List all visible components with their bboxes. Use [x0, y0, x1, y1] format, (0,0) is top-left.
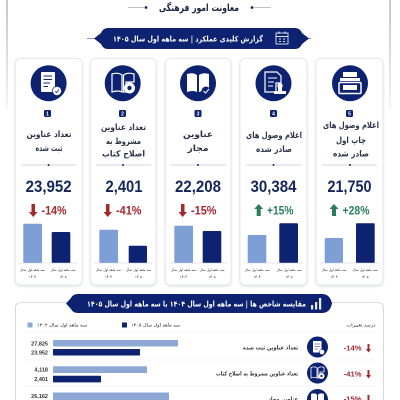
change: -41%: [116, 206, 142, 218]
icon: document: [307, 336, 328, 358]
change: -15%: [191, 206, 216, 218]
bar chart: سه ماهه اول سال: [50, 268, 76, 272]
icon: open book with check: [180, 65, 216, 101]
panel: card 1 registered titles: [16, 58, 82, 285]
card title: عناوین: [183, 130, 213, 140]
card title: مشروط به: [106, 137, 141, 147]
number badge 2: [119, 110, 126, 118]
value: 22,208: [175, 177, 221, 196]
icon: bar chart glyph: [311, 298, 321, 310]
section banner: key performance report: گزارش کلیدی عملکرد | سه ماهه اول سال ۱۴۰۵: [113, 34, 263, 44]
legend: سه ماهه اول سال ۱۴۰۵: [131, 324, 180, 328]
number badge 1: [44, 110, 51, 118]
change: [29, 204, 66, 218]
row 3: 26,162: [31, 394, 48, 400]
title: معاونت امور فرهنگی: [159, 1, 239, 14]
bar chart: [320, 223, 379, 279]
row 2: [34, 362, 371, 384]
bar chart: ۱۴۰۵: [59, 275, 67, 279]
bar chart: سه ماهه اول سال: [20, 268, 45, 272]
section banner: comparison: مقایسه شاخص ها | سه ماهه اول سال ۱۴۰۴ با سه ماهه اول سال ۱۴۰۵: [87, 300, 306, 310]
row 1: 27,825: [31, 342, 48, 348]
bar chart: ۱۴۰۴: [105, 275, 112, 279]
bar chart: سه ماهه اول سال: [321, 268, 347, 272]
card title: [183, 130, 213, 154]
number badge 4: 4: [272, 112, 275, 118]
change: [254, 204, 294, 218]
bar chart: سه ماهه اول سال: [96, 268, 121, 272]
bar chart: ۱۴۰۴: [330, 275, 338, 279]
card title: اعلام وصول های: [246, 131, 302, 141]
number badge 5: 5: [348, 112, 351, 118]
bar chart: سه ماهه اول سال: [199, 268, 225, 272]
change: -14%: [42, 206, 66, 218]
card title: [26, 130, 72, 154]
change: +15%: [267, 206, 294, 218]
icon: calendar: [276, 32, 288, 44]
bar chart: ۱۴۰۵: [135, 275, 142, 279]
card title: [101, 123, 146, 160]
panel: card 2 titles conditional on correction: [90, 58, 156, 285]
card title: [246, 131, 302, 155]
value: 23,952: [26, 177, 72, 196]
bar chart: سه ماهه اول سال: [126, 268, 151, 272]
icon: open book: [307, 389, 328, 400]
card title: اعلام وصول های: [323, 121, 379, 131]
row 2: -41%: [344, 370, 362, 378]
icon: printing machine: [332, 65, 368, 101]
icon: document with check: [31, 65, 67, 101]
number badge 2: 2: [121, 112, 124, 118]
row 1: -14%: [344, 344, 362, 352]
icon: book with gear: [307, 362, 328, 384]
row 1: [31, 336, 371, 358]
section banner: comparison: [66, 294, 332, 313]
bar chart: سه ماهه اول سال: [276, 268, 302, 272]
bar chart: ۱۴۰۵: [208, 275, 216, 279]
bar chart: [94, 230, 153, 279]
bar chart: سه ماهه اول سال: [352, 268, 378, 272]
card title: ثبت شده: [36, 144, 62, 154]
row 2: 4,118: [35, 368, 48, 374]
bar chart: ۱۴۰۴: [253, 275, 261, 279]
bar chart: سه ماهه اول سال: [171, 268, 196, 272]
change: [104, 204, 142, 218]
row 1: تعداد عناوین ثبت شده: [243, 346, 298, 352]
icon: book with gear: [105, 65, 141, 101]
icon: document with stamp: [256, 65, 292, 101]
row 3: [31, 389, 371, 400]
number badge 1: 1: [46, 112, 49, 118]
column heading: درصد تغییرات: [346, 324, 376, 328]
card title: چاپ اول: [336, 136, 366, 146]
bar chart: سه ماهه اول سال: [244, 268, 270, 272]
panel: card 4 issued receipts: [240, 58, 307, 285]
panel: card 5 first-print receipts: [316, 58, 383, 285]
bar chart: ۱۴۰۴: [29, 275, 36, 279]
change: [330, 204, 370, 218]
number badge 5: [346, 110, 353, 118]
card title: مجاز: [186, 144, 208, 154]
number badge 3: [194, 110, 202, 118]
change: [178, 204, 216, 218]
bar chart: [169, 226, 228, 279]
legend: سه ماهه اول سال ۱۴۰۴: [37, 324, 87, 328]
card title: تعداد عناوین: [26, 130, 72, 140]
bar chart: ۱۴۰۵: [285, 275, 293, 279]
section banner: key performance report: [87, 28, 311, 49]
change: +28%: [342, 206, 370, 218]
value: 30,384: [250, 177, 297, 196]
row 2: تعداد عناوین مشروط به اصلاح کتاب: [216, 370, 298, 378]
bar chart: [244, 223, 303, 279]
bar chart: [19, 224, 78, 279]
number badge 3: 3: [197, 112, 200, 118]
card title: صادر شده: [333, 150, 369, 160]
card title: اصلاح کتاب: [102, 150, 145, 160]
row 1: 23,952: [31, 350, 48, 356]
bar chart: ۱۴۰۴: [180, 275, 187, 279]
number badge 4: [270, 110, 277, 118]
value: 2,401: [106, 177, 142, 196]
value: 21,750: [328, 177, 372, 196]
row 2: 2,401: [34, 377, 48, 383]
panel: comparison table: [16, 294, 384, 400]
legend: [28, 322, 180, 328]
card title: صادر شده: [256, 145, 292, 155]
card title: تعداد عناوین: [101, 123, 146, 133]
bar chart: ۱۴۰۵: [361, 275, 369, 279]
panel: card 3 licensed titles: [166, 58, 231, 285]
card title: [323, 121, 379, 160]
